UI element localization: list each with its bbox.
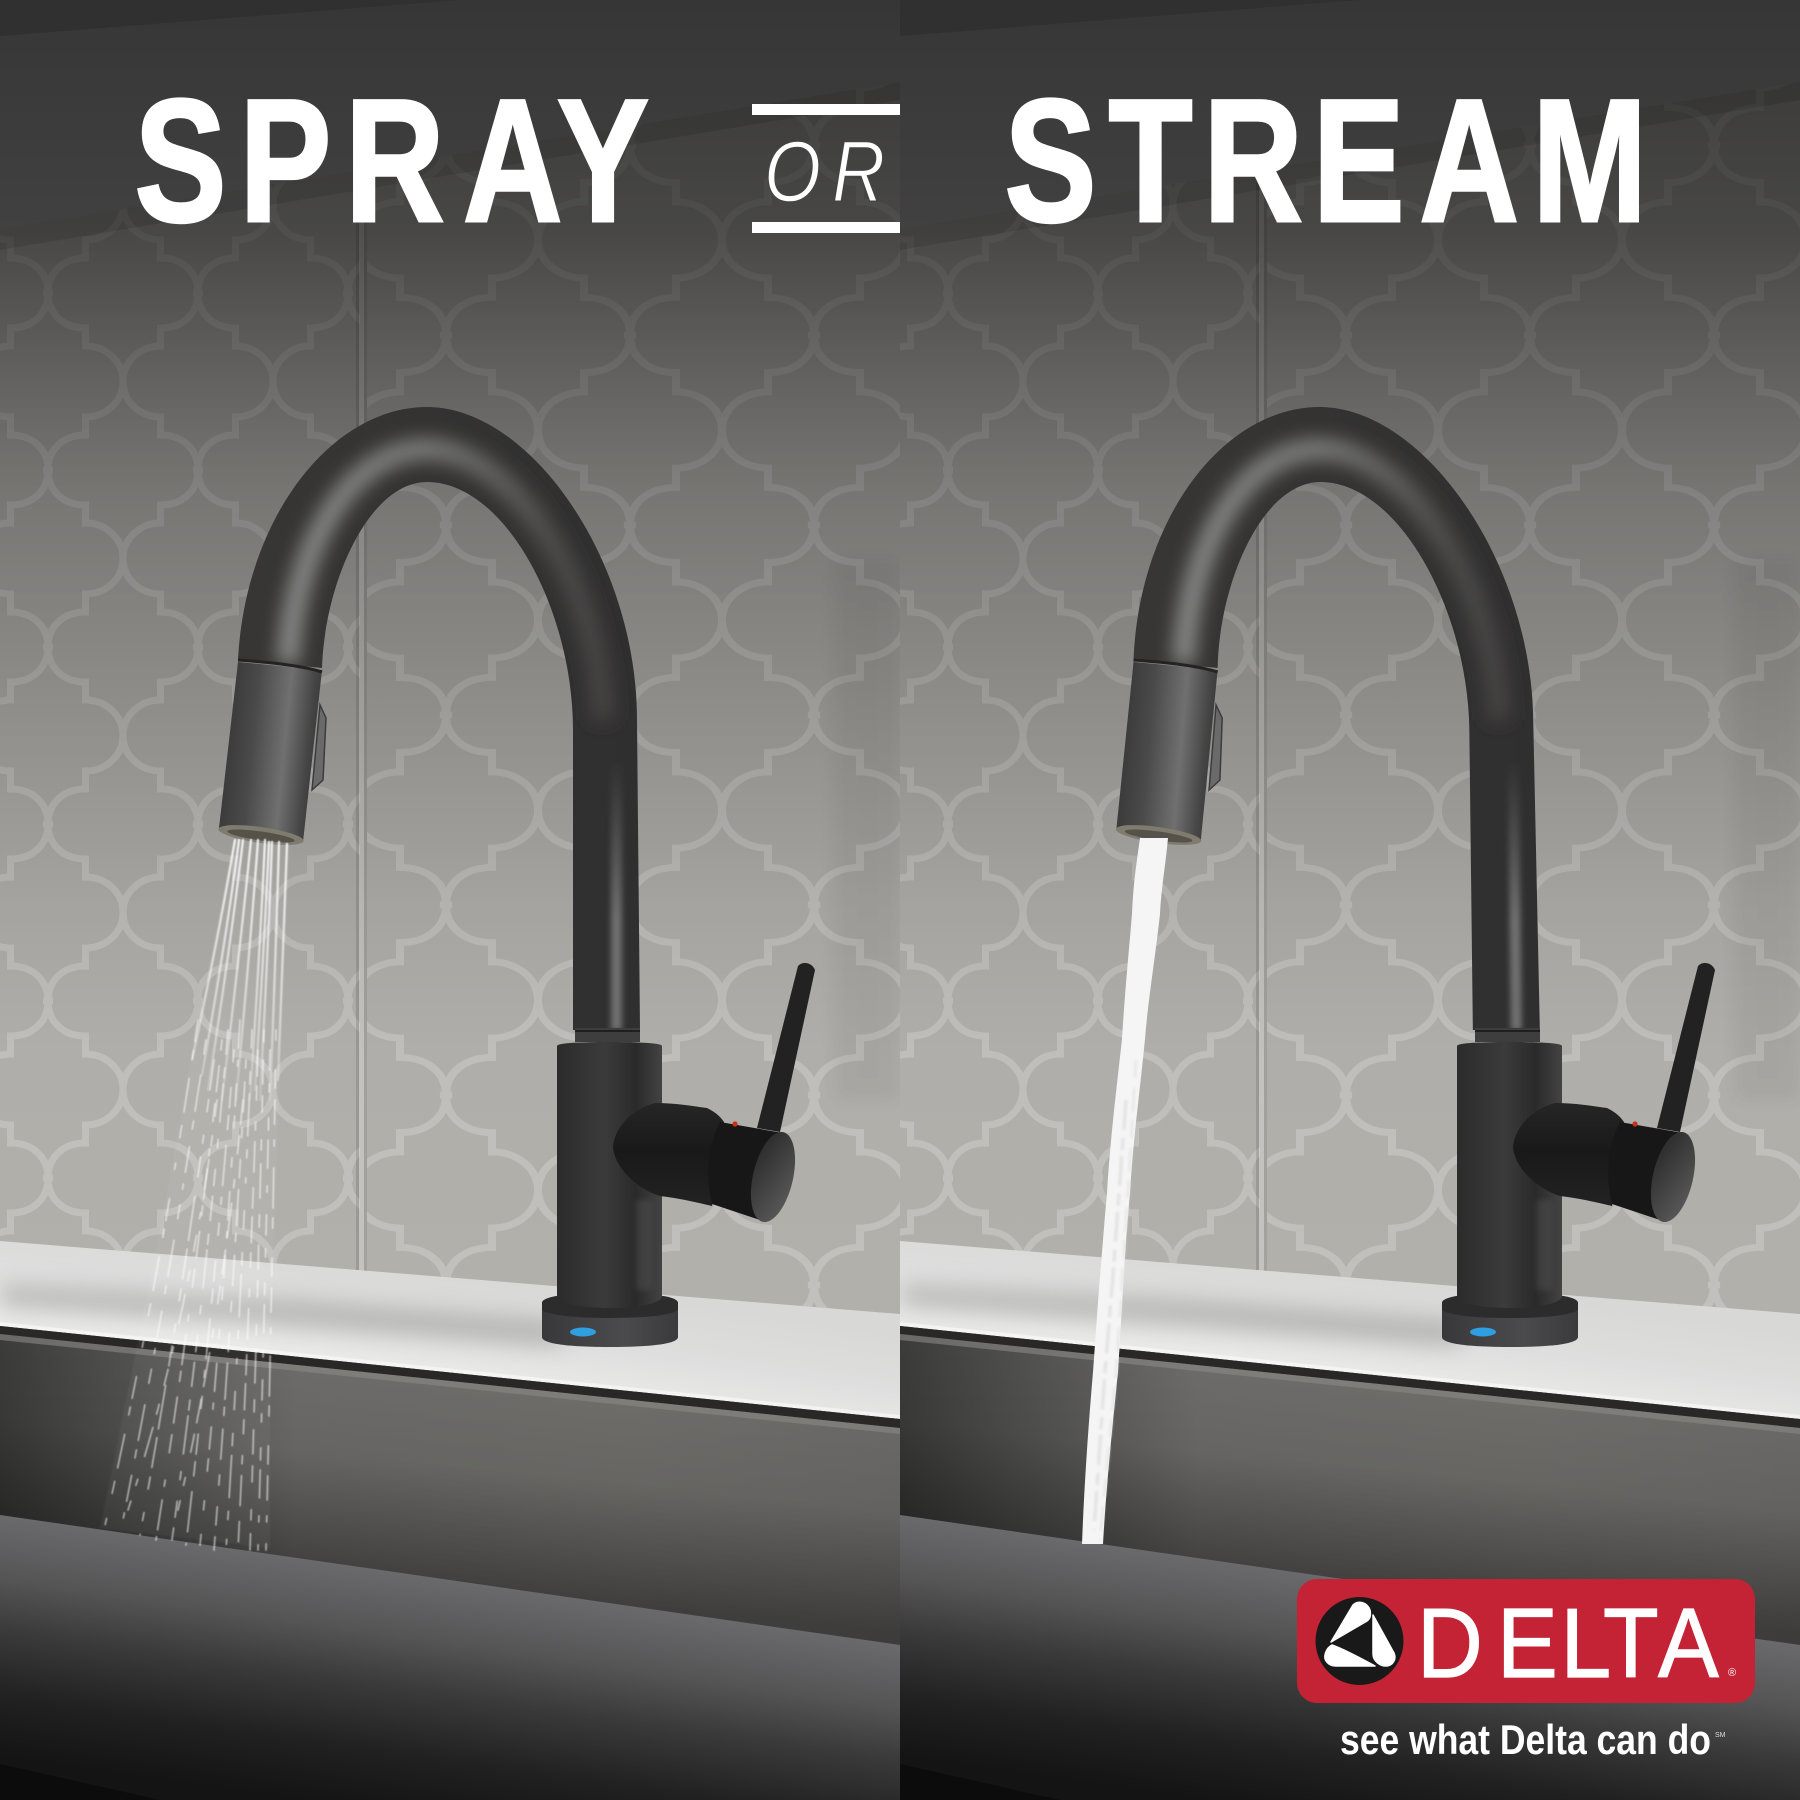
heading: OR with rules <box>752 104 900 233</box>
icon: blue indicator light <box>1470 1328 1496 1336</box>
stream of water <box>1082 838 1168 1544</box>
heading: STREAM: STREAM <box>1005 63 1647 259</box>
service mark: SM <box>1715 1732 1726 1739</box>
registered mark: ® <box>1728 1667 1736 1679</box>
spray water <box>100 840 290 1550</box>
faucet body, handle and base <box>542 963 815 1347</box>
icon: blue indicator light <box>570 1328 596 1336</box>
heading: OR with rules: OR <box>764 123 885 219</box>
wordmark: DELTA: DELTA <box>1417 1589 1719 1699</box>
tagline: see what Delta can do <box>1340 1716 1711 1763</box>
background: tiled wall, counter and sink <box>900 0 1800 1800</box>
faucet spout and spray head <box>1110 407 1540 1030</box>
panel: spray <box>0 0 900 1800</box>
background: tiled wall, counter and sink <box>0 0 900 1800</box>
logo: Delta red badge <box>1297 1579 1755 1703</box>
heading: SPRAY: SPRAY <box>135 63 649 259</box>
icon: Delta triangle emblem <box>1316 1597 1404 1685</box>
panel: stream <box>900 0 1800 1800</box>
faucet body, handle and base <box>1442 963 1715 1347</box>
faucet spout and spray head <box>217 407 640 1030</box>
